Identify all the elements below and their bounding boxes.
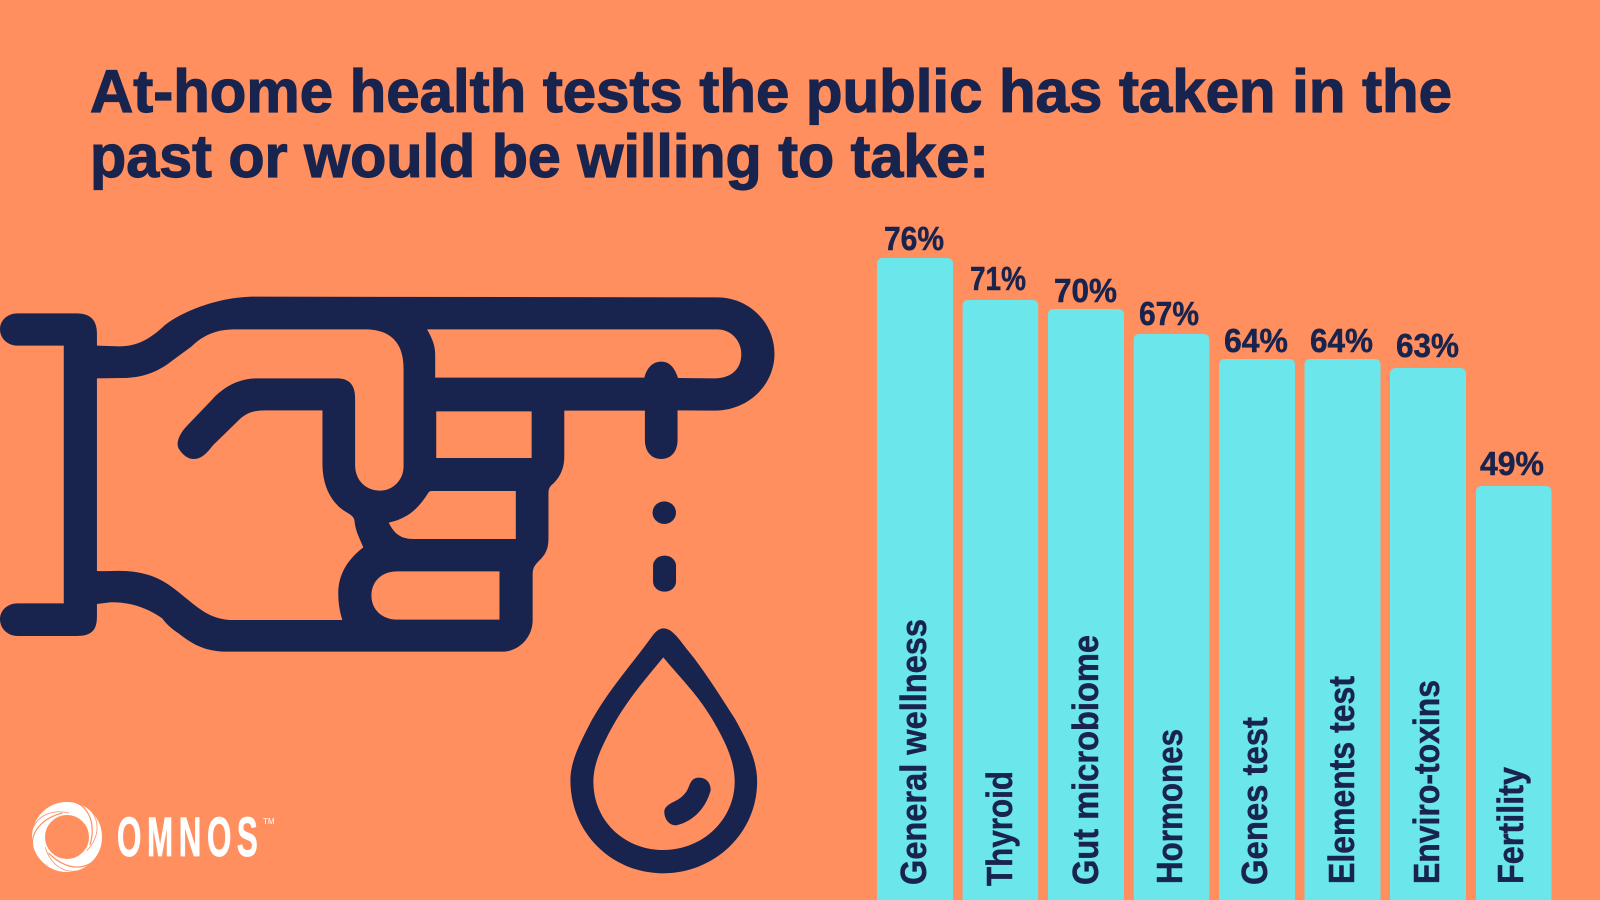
bar: Genes test 64%: Genes test	[1234, 717, 1275, 885]
bar: General wellness 76%	[877, 220, 953, 900]
bar: Elements test 64%: Elements test	[1321, 676, 1362, 884]
logo mark: swirl ring	[23, 801, 108, 880]
title	[90, 58, 1452, 190]
bar: Fertility 49%: Fertility	[1490, 767, 1531, 884]
bar: Enviro-toxins 63%	[1390, 327, 1466, 900]
logo: OMNOS	[23, 801, 275, 880]
bar: Thyroid 71%	[963, 260, 1038, 900]
icon: blood drop	[570, 628, 757, 873]
bar: Gut microbiome 70%: 70%	[1054, 272, 1117, 309]
trademark: TM	[263, 817, 275, 826]
bar: Gut microbiome 70%	[1048, 272, 1124, 900]
bar: Elements test 64%: 64%	[1310, 322, 1373, 359]
bar: Fertility 49%	[1476, 445, 1552, 900]
bar: General wellness 76%: 76%	[884, 220, 944, 257]
bar: Fertility 49%: 49%	[1480, 445, 1544, 482]
bar: Enviro-toxins 63%: Enviro-toxins	[1406, 680, 1447, 884]
bar: Genes test 64%	[1219, 322, 1295, 900]
bar chart	[877, 220, 1552, 900]
icon: falling blood drips	[653, 501, 676, 592]
logo wordmark: OMNOS	[117, 805, 263, 868]
bar: Elements test 64%	[1304, 322, 1380, 900]
icon: hand pointing with pricked finger	[0, 297, 774, 652]
bar: Hormones 67%	[1134, 295, 1209, 900]
bar: Thyroid 71%: 71%	[970, 260, 1026, 297]
bar: Hormones 67%: Hormones	[1149, 729, 1190, 884]
bar: Hormones 67%: 67%	[1139, 295, 1199, 332]
bar: Enviro-toxins 63%: 63%	[1396, 327, 1459, 364]
title: At-home health tests the public has taken in the	[90, 58, 1452, 125]
bar: General wellness 76%: General wellness	[893, 619, 934, 885]
bar: Genes test 64%: 64%	[1224, 322, 1288, 359]
title: past or would be willing to take:	[90, 123, 989, 190]
bar: Gut microbiome 70%: Gut microbiome	[1065, 635, 1106, 885]
bar: Thyroid 71%: Thyroid	[979, 771, 1020, 886]
